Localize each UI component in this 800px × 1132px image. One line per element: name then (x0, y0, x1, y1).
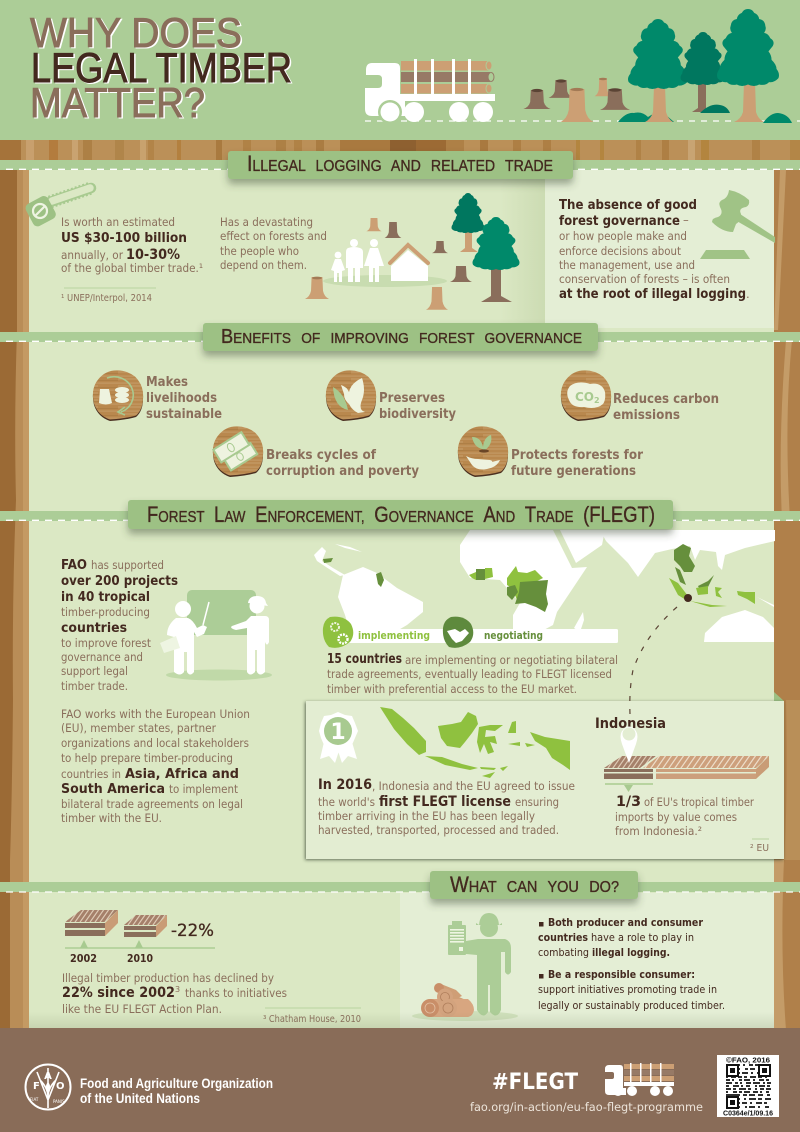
benefit: future generations: Protects forests for (511, 448, 644, 463)
text block: first FLEGT license: In 2016 (318, 777, 372, 793)
text block: illegal timber decline: Illegal timber production has declined by (62, 971, 274, 985)
logo: FAO: PANIS (53, 1099, 65, 1104)
benefit: carbon: emissions (613, 408, 680, 423)
strip: section 1 (0, 160, 800, 170)
header background (0, 0, 800, 140)
benefit: corruption (213, 426, 419, 479)
text block: forest governance (559, 198, 750, 302)
text block: one third of imports: 1/3 (616, 794, 641, 810)
illustration: family, house, stumps and trees (305, 193, 520, 310)
text block: what to do (538, 916, 725, 1012)
text block: devastating effect: the people who (220, 244, 299, 258)
text block: value of illegal logging: ¹ UNEP/Interpol, 2014 (61, 293, 152, 304)
text block: FAO has supported: over 200 projects (61, 574, 178, 589)
text block: forest governance: . (746, 287, 750, 301)
text block: FAO works with: South America (61, 782, 165, 797)
text block: 15 countries: 15 countries (327, 652, 402, 667)
text block: value of illegal logging (61, 215, 203, 304)
chart: timber decline 2002-2010: 2010 (127, 952, 153, 965)
benefit: livelihoods: livelihoods (146, 391, 217, 406)
icon: number one medal (319, 712, 358, 763)
text block: FAO has supported: timber-producing (61, 605, 150, 619)
text block: first FLEGT license: timber arriving in the EU has been legally (318, 809, 535, 823)
text block: FAO has supported (61, 558, 178, 693)
illustration: forester with clipboard and logs (412, 913, 518, 1021)
text block: one third of imports (615, 794, 769, 854)
benefit: carbon (561, 370, 719, 423)
text block: what to do: legally or sustainably produced timber. (538, 999, 725, 1012)
text block: devastating effect: effect on forests and (220, 229, 327, 243)
chart: timber decline 2002-2010: -22% (171, 921, 214, 941)
text block: 15 countries: trade agreements, eventually leading to FLEGT licensed (327, 667, 612, 681)
text block: FAO has supported: governance and (61, 650, 143, 664)
text block: FAO has supported: in 40 tropical (61, 590, 150, 605)
benefit: carbon: 2 (594, 396, 600, 405)
text block: FAO has supported: timber trade. (61, 679, 128, 693)
chart: Indonesian share of timber imports (604, 726, 769, 792)
QR code: C0364e/1/09.16 (723, 1110, 773, 1118)
panel: what can you do background (400, 893, 774, 1028)
chart: timber decline 2002-2010 (65, 910, 215, 965)
benefit: carbon: Reduces carbon (613, 392, 719, 407)
ground dashed line (365, 120, 800, 122)
map: Indonesia (380, 707, 570, 778)
text block: what to do: countries (538, 931, 588, 944)
text block: FAO works with: to help prepare timber-producing (61, 751, 233, 765)
chart: timber decline 2002-2010: 2002 (70, 952, 97, 965)
left wood post (0, 160, 29, 1030)
text block: forest governance: – (683, 213, 689, 227)
text block: illegal timber decline: ³ Chatham House, 2010 (263, 1014, 361, 1025)
text block: first FLEGT license: , Indonesia and the EU agreed to issue (372, 779, 575, 793)
heading: illegal logging: ILLEGAL LOGGING AND RELATED TRADE (247, 151, 553, 176)
text block: FAO works with: Asia, Africa and (125, 767, 239, 782)
map legend: implementing (358, 629, 430, 642)
text block: forest governance: conservation of forests – is often (559, 272, 730, 286)
text block: forest governance: at the root of illegal logging (559, 287, 746, 302)
text block: illegal timber decline: thanks to initiatives (185, 986, 287, 1000)
strip: section 3 (0, 511, 800, 521)
text block: devastating effect: depend on them. (220, 258, 307, 272)
text block: devastating effect: Has a devastating (220, 215, 313, 229)
heading: what can you do: WHAT CAN YOU DO? (450, 872, 619, 897)
benefit: livelihoods: Makes (146, 375, 188, 390)
text block: first FLEGT license: first FLEGT license (379, 794, 511, 810)
text block: FAO works with: to implement (169, 782, 238, 796)
text block: what to do: Both producer and consumer (548, 916, 703, 929)
text block: one third of imports: from Indonesia.² (615, 824, 702, 838)
icon: crossed-out chainsaw (24, 188, 91, 228)
bottom shading of main panel (29, 1012, 774, 1028)
text block: forest governance: the management, use and (559, 258, 695, 272)
text block: what to do: illegal logging. (592, 946, 670, 959)
panel: Indonesia (306, 692, 784, 859)
text block: FAO works with: timber with the EU. (61, 811, 162, 825)
text block: FAO works with: organizations and local stakeholders (61, 736, 249, 750)
text block: one third of imports: imports by value comes (615, 810, 737, 824)
map legend (323, 617, 618, 648)
title (30, 9, 294, 127)
text block: FAO works with: (EU), member states, partner (61, 721, 216, 735)
panel: governance callout background (500, 170, 774, 328)
title: MATTER? (30, 79, 205, 126)
illustration: teacher and forester at board (160, 590, 272, 680)
title: LEGAL TIMBER (31, 44, 292, 91)
title: MATTER? (32, 80, 206, 127)
text block: forest governance: enforce decisions about (559, 244, 681, 258)
logo: FAO: FIAT (30, 1097, 39, 1102)
benefit: biodiversity (326, 370, 456, 422)
heading: benefits: BENEFITS OF IMPROVING FOREST GOVERNANCE (221, 326, 582, 348)
text block: 15 countries (327, 652, 618, 696)
benefit: livelihoods: sustainable (146, 407, 222, 422)
benefit: corruption: corruption and poverty (266, 464, 419, 479)
text block: first FLEGT license: harvested, transported, processed and traded. (318, 823, 559, 837)
text block: FAO has supported: support legal (61, 664, 128, 678)
text block: FAO works with: countries in (61, 767, 121, 781)
icon: gavel (700, 190, 775, 259)
text block: first FLEGT license (318, 777, 575, 837)
text block: FAO works with (61, 707, 250, 825)
benefit: biodiversity: biodiversity (379, 407, 456, 422)
text block: forest governance: The absence of good (559, 198, 697, 213)
logo: FAO (26, 1064, 70, 1110)
text block: forest governance: forest governance (559, 214, 680, 229)
text block: FAO has supported: FAO (61, 558, 87, 573)
text block: FAO has supported: has supported (91, 558, 164, 572)
text block: FAO has supported: countries (61, 621, 127, 636)
icon: number one medal: 1 (330, 720, 346, 745)
text block: illegal timber decline: 3 (175, 985, 180, 994)
text block: one third of imports: ² EU (750, 843, 769, 854)
logo: FAO: F (33, 1081, 40, 1092)
text block: one third of imports: of EU's tropical timber (644, 795, 754, 809)
text block: what to do: have a role to play in (591, 931, 694, 944)
text block: FAO works with: bilateral trade agreements on legal (61, 797, 243, 811)
text block: illegal timber decline: like the EU FLEGT Action Plan. (62, 1002, 222, 1016)
text block: devastating effect (220, 215, 327, 272)
text block: what to do: support initiatives promoting trade in (538, 983, 717, 996)
QR code (717, 1055, 779, 1118)
footer (0, 1028, 800, 1132)
benefit: biodiversity: Preserves (379, 391, 445, 406)
text block: FAO has supported: to improve forest (61, 636, 151, 650)
URL: fao.org/in-action/eu-fao-flegt-programme (470, 1100, 703, 1114)
wood band under header (0, 140, 800, 160)
text block: first FLEGT license: ensuring (515, 795, 559, 809)
map location dot and dashed route (630, 594, 692, 714)
organization name (80, 1076, 273, 1106)
organization name: of the United Nations (80, 1091, 200, 1106)
illustration: stumps and trees (523, 9, 792, 123)
world map (314, 530, 775, 642)
small truck logo (605, 1063, 674, 1096)
title: WHY DOES (30, 9, 242, 56)
text block: value of illegal logging: Is worth an estimated (61, 215, 175, 229)
benefit: future generations: future generations (511, 464, 636, 479)
text block: first FLEGT license: the world's (318, 795, 375, 809)
benefit: corruption: Breaks cycles of (266, 448, 376, 463)
text block: forest governance: or how people make and (559, 229, 687, 243)
QR code: ©FAO, 2016 (726, 1056, 770, 1064)
text block: value of illegal logging: annually, or (61, 248, 123, 262)
text block: illegal timber decline (62, 971, 361, 1025)
logo: FAO: A (44, 1071, 52, 1082)
title: WHY DOES (32, 10, 244, 57)
text block: value of illegal logging: 10-30% (126, 247, 180, 263)
logo: FAO: O (56, 1081, 65, 1092)
text block: what to do: combating (538, 946, 589, 959)
right wood post (774, 160, 800, 1030)
organization name: Food and Agriculture Organization (80, 1076, 273, 1091)
text block: illegal timber decline: 22% since 2002 (62, 985, 175, 1001)
text block: 15 countries: are implementing or negotiating bilateral (405, 653, 618, 667)
benefit: carbon: CO (575, 390, 594, 404)
text block: value of illegal logging: of the global timber trade.¹ (61, 261, 203, 275)
illustration: logging truck (365, 59, 495, 124)
benefit: livelihoods (93, 370, 222, 422)
heading: FLEGT: FOREST LAW ENFORCEMENT, GOVERNANCE AND TRADE (FLEGT) (147, 502, 655, 527)
label: Indonesia: Indonesia (595, 716, 666, 732)
benefit: future generations (458, 426, 644, 479)
map legend: negotiating (484, 629, 543, 642)
text block: value of illegal logging: US $30-100 billion (61, 231, 187, 246)
text block: what to do: Be a responsible consumer: (548, 968, 695, 981)
strip: section 4 (0, 882, 800, 892)
text block: FAO works with: FAO works with the European Union (61, 707, 250, 721)
hashtag: #FLEGT (492, 1070, 578, 1095)
title: LEGAL TIMBER (32, 45, 294, 92)
strip: section 2 (0, 332, 800, 342)
text block: 15 countries: timber with preferential access to the EU market. (327, 682, 577, 696)
